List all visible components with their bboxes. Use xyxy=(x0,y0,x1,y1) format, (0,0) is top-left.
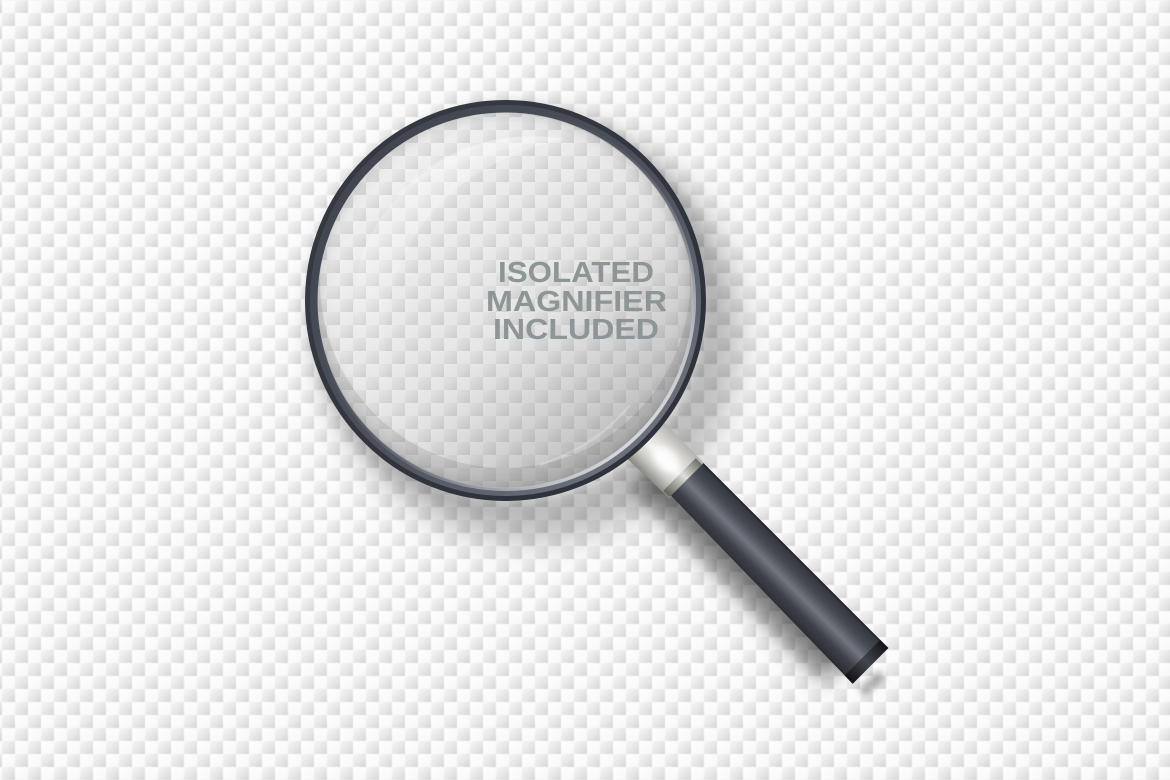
lens caption xyxy=(488,262,666,340)
lower crescent reflection xyxy=(318,268,692,488)
glass lens xyxy=(312,96,698,494)
handle xyxy=(621,416,889,684)
inner edge shadow xyxy=(312,108,698,494)
caption line 1: ISOLATED xyxy=(498,257,654,289)
caption line 3: INCLUDED xyxy=(493,314,659,346)
caption line 2: MAGNIFIER xyxy=(486,286,667,318)
dark lens ring xyxy=(308,102,704,498)
glare highlight xyxy=(365,137,548,260)
black grip xyxy=(668,463,888,684)
metal collar xyxy=(621,416,705,500)
cast shadow of magnifier xyxy=(314,110,882,692)
magnifying glass xyxy=(308,96,889,684)
lower-right glare arc xyxy=(540,405,630,465)
